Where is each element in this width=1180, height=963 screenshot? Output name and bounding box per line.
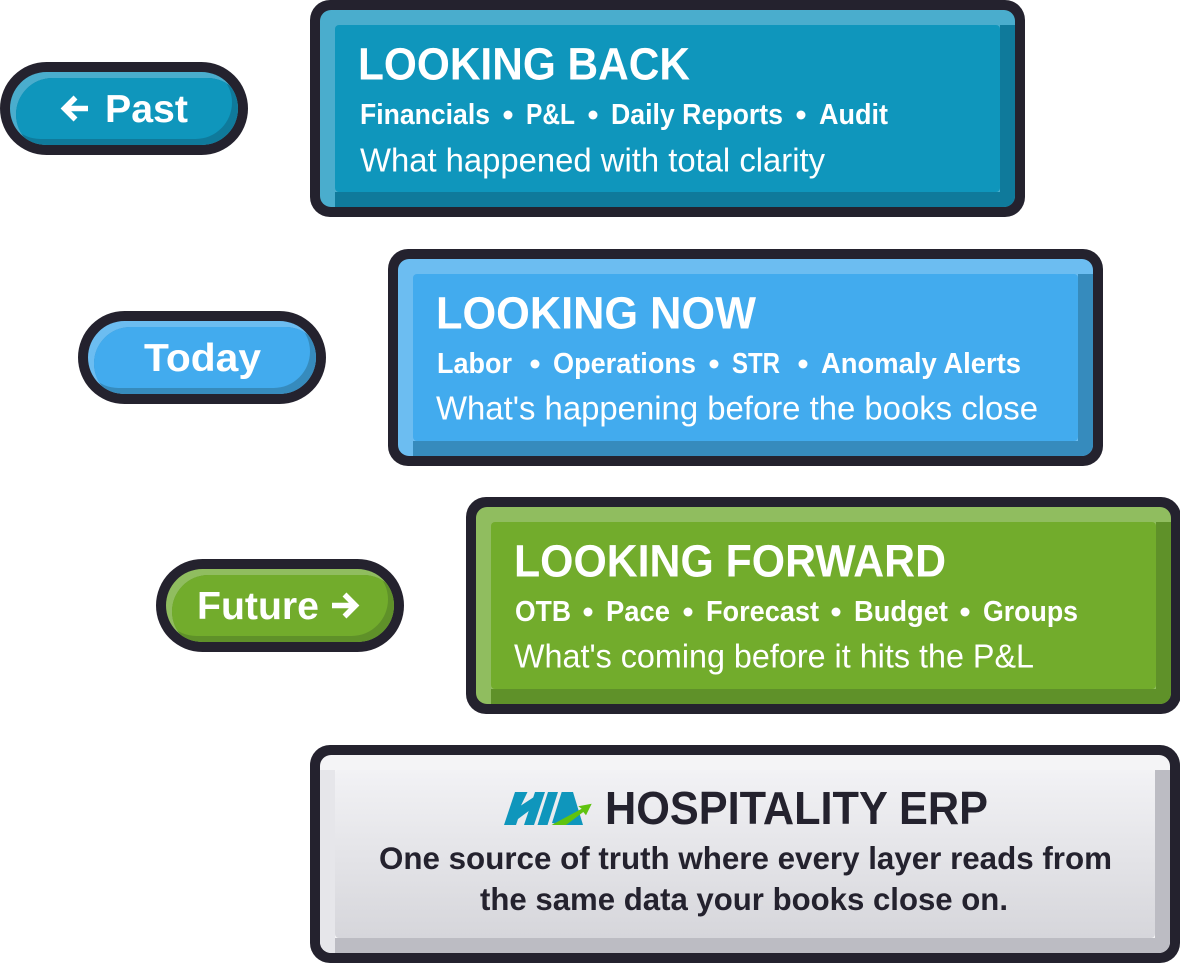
topics: [437, 348, 1021, 380]
panel: Looking Now: [388, 249, 1103, 466]
description: What's coming before it hits the P&L: [514, 638, 1034, 676]
panel: Looking Back: [310, 0, 1025, 217]
topics: Pace: [606, 596, 670, 628]
heading: LOOKING FORWARD: [514, 536, 946, 586]
topics: Audit: [819, 99, 888, 131]
topics: [360, 99, 888, 131]
topics: Budget: [854, 596, 948, 628]
label: Future: Future: [197, 585, 319, 628]
topics: STR: [732, 348, 780, 380]
topics: Anomaly Alerts: [821, 348, 1021, 380]
panel: Looking Forward: [466, 497, 1180, 714]
topics: Labor: [437, 348, 512, 380]
brand name: HOSPITALITY ERP: [605, 782, 988, 834]
logo: HIA: [504, 792, 592, 825]
heading: LOOKING NOW: [436, 288, 757, 338]
label: Past: Past: [105, 88, 188, 131]
topics: Operations: [553, 348, 696, 380]
pill: Past: [0, 62, 250, 157]
heading: LOOKING BACK: [358, 38, 690, 90]
panel: Hospitality ERP: [310, 745, 1180, 963]
label: Today: Today: [144, 337, 262, 380]
icon: left arrow: [64, 98, 88, 120]
pill: Future: [156, 559, 406, 654]
topics: [515, 596, 1078, 628]
topics: Financials: [360, 99, 490, 131]
topics: OTB: [515, 596, 571, 628]
tagline: One source of truth where every layer reads from: [379, 840, 1112, 876]
tagline: [379, 840, 1112, 917]
description: What happened with total clarity: [360, 142, 825, 180]
topics: P&L: [526, 99, 575, 131]
pill: Today: [78, 311, 328, 406]
description: What's happening before the books close: [436, 390, 1038, 428]
tagline: the same data your books close on.: [480, 881, 1008, 917]
icon: right arrow: [332, 594, 356, 616]
topics: Forecast: [706, 596, 819, 628]
topics: Groups: [983, 596, 1078, 628]
topics: Daily Reports: [611, 99, 783, 131]
